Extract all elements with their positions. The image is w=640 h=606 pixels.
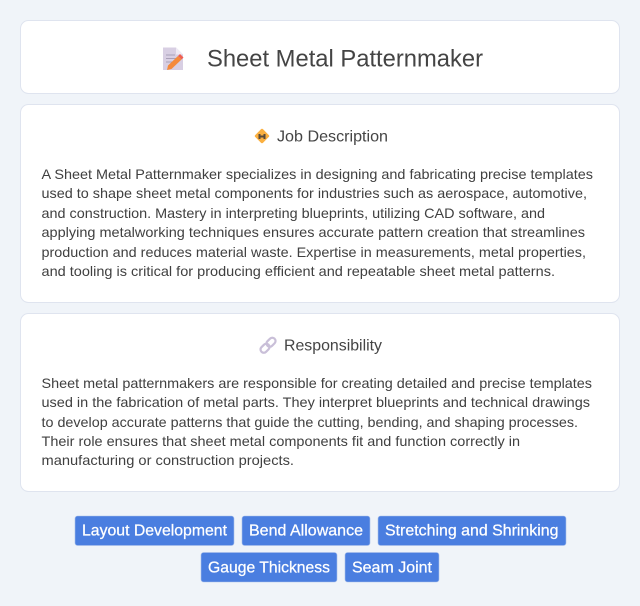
text block: responsibility — [42, 375, 592, 468]
icon: document with pencil — [163, 48, 184, 70]
tag: layout development — [75, 516, 234, 546]
icon: orange diamond — [254, 128, 270, 144]
text block: job description: production and reduces material waste. Expertise in measurements, metal properties, — [42, 244, 586, 260]
tag: bend allowance: Bend Allowance — [249, 522, 363, 540]
tag: stretching and shrinking — [378, 516, 566, 546]
panel: title card — [20, 20, 620, 94]
panel: job description — [20, 104, 620, 302]
heading: responsibility: Responsibility — [284, 338, 382, 354]
text block: responsibility: manufacturing or construction projects. — [42, 452, 294, 468]
icon: chain link — [259, 336, 277, 354]
tag: gauge thickness — [201, 552, 337, 582]
text block: job description: used to shape sheet metal components for industries such as aerospace, automotive, — [42, 185, 587, 201]
text block: job description: and tooling is critical for producing efficient and repeatable sheet metal patterns. — [42, 263, 555, 279]
text block: job description — [42, 166, 593, 279]
text block: job description: applying metalworking techniques ensures accurate pattern creation that streamlines — [42, 224, 585, 240]
tag: layout development: Layout Development — [82, 522, 228, 540]
title: Sheet Metal Patternmaker — [207, 46, 483, 72]
heading: job description: Job Description — [277, 128, 388, 146]
panel: responsibility — [20, 314, 620, 492]
text block: responsibility: Sheet metal patternmakers are responsible for creating detailed and precise templates — [42, 375, 592, 391]
tag: gauge thickness: Gauge Thickness — [208, 560, 330, 576]
tag: seam joint — [345, 552, 439, 582]
tag: stretching and shrinking: Stretching and Shrinking — [385, 522, 558, 540]
tag: seam joint: Seam Joint — [352, 560, 433, 576]
tag: bend allowance — [242, 516, 370, 546]
text block: job description: and construction. Mastery in interpreting blueprints, utilizing CAD software, and — [42, 205, 545, 221]
text block: responsibility: Their role ensures that sheet metal components fit and function correctly in — [42, 433, 520, 449]
text block: responsibility: to develop accurate patterns that guide the cutting, bending, and shaping processes. — [42, 414, 578, 430]
text block: responsibility: used in the fabrication of metal parts. They interpret blueprints and technical drawings — [42, 394, 590, 410]
text block: job description: A Sheet Metal Patternmaker specializes in designing and fabricating precise templates — [42, 166, 593, 182]
